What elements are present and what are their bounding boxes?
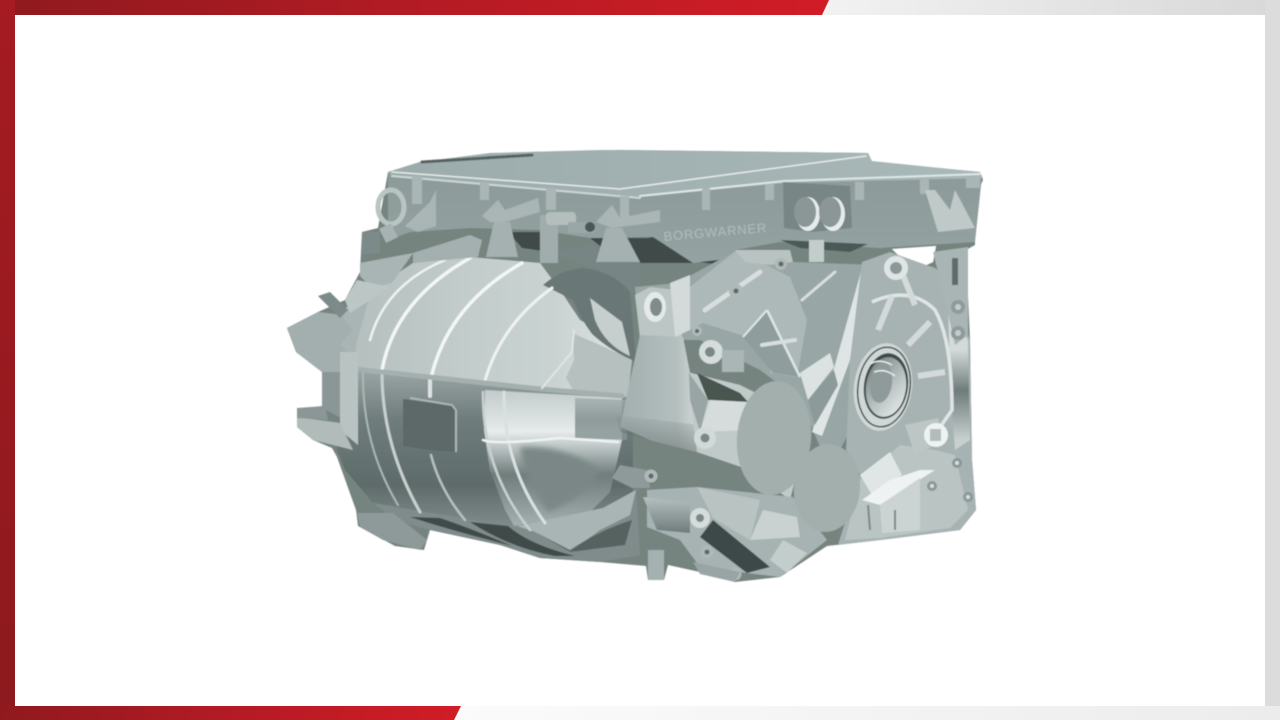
lower gearbox xyxy=(647,487,827,577)
control housing lid xyxy=(388,150,983,197)
outer ring of end plate xyxy=(948,300,970,450)
frame: bottom bar xyxy=(0,706,1280,720)
output shaft bore xyxy=(848,339,918,435)
top lug xyxy=(735,250,793,265)
dark wedge xyxy=(743,310,800,377)
gearbox end plate xyxy=(838,252,976,545)
frame: left red bar xyxy=(0,0,15,720)
control housing side wall xyxy=(388,172,982,263)
connector ports xyxy=(783,182,852,232)
boss left xyxy=(635,275,690,337)
vertical tube on top of motor xyxy=(486,212,640,263)
gear cover lower xyxy=(790,441,864,535)
motor ribs xyxy=(355,258,622,530)
motor bottom band xyxy=(373,490,640,562)
fins xyxy=(878,268,945,376)
frame: top bar xyxy=(0,0,1280,15)
light bars on upper housing xyxy=(705,272,835,345)
lid highlight edges xyxy=(392,155,980,198)
drive unit xyxy=(287,150,983,582)
motor upper half xyxy=(350,257,627,397)
brand text: BORGWARNER xyxy=(663,220,768,244)
frame: right grey bar xyxy=(1265,0,1280,720)
motor shaded crescent xyxy=(520,447,600,512)
housing posts and brackets xyxy=(405,176,980,232)
motor lower right highlight xyxy=(484,390,622,526)
upper gear housing xyxy=(677,250,807,377)
under arch block xyxy=(566,333,632,397)
boss lower right and bolts xyxy=(905,418,973,502)
motor end flange xyxy=(287,232,482,550)
lifting eye xyxy=(378,190,404,240)
connecting tube xyxy=(575,398,627,440)
motor lower half xyxy=(337,369,633,527)
dark undercut shadows xyxy=(508,232,868,265)
diagonal strip xyxy=(812,268,877,436)
base silhouette xyxy=(287,150,983,582)
gear cover upper xyxy=(732,378,816,498)
lower ribs xyxy=(845,445,968,540)
gearbox mid panels xyxy=(635,250,877,470)
rectangular pad on motor xyxy=(403,399,457,452)
white gap behind end plate xyxy=(892,246,936,268)
bosses on block xyxy=(692,240,824,449)
dark arch cutout xyxy=(543,268,636,362)
boss upper right and bracket xyxy=(884,247,968,345)
pad to right of arch xyxy=(590,298,630,356)
grey band behind motor xyxy=(547,245,640,300)
arc rim xyxy=(872,295,952,430)
gearbox block xyxy=(620,335,700,452)
diagonal stub xyxy=(800,353,834,400)
block right panels xyxy=(687,372,810,500)
